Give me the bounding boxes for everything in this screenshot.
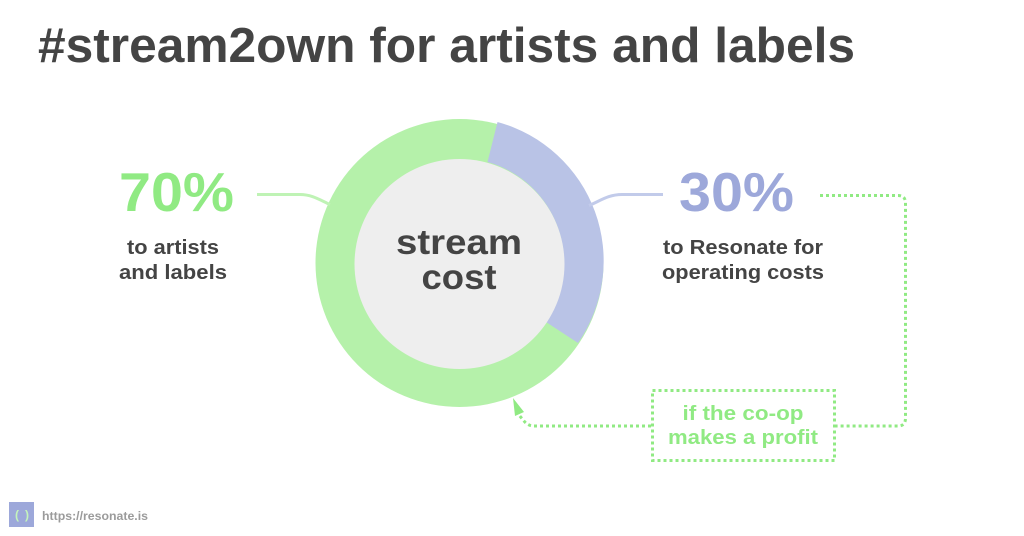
centre label: cost	[422, 258, 497, 297]
footer logo: )	[25, 508, 29, 522]
title: #stream2own for artists and labels	[38, 19, 855, 73]
footer logo: (	[15, 508, 19, 522]
stat: 30%: operating costs	[662, 262, 824, 284]
connector: 70% to donut	[257, 194, 330, 204]
stat: 30%: 30%	[679, 161, 794, 223]
segment: 30% Resonate	[488, 122, 604, 343]
stat: 70%	[119, 161, 234, 284]
connector: donut to 30%	[589, 194, 663, 206]
stat: 70%: to artists	[127, 237, 219, 259]
dotted arrow: 30% to profit box	[820, 196, 906, 426]
footer logo	[9, 502, 34, 527]
centre label	[396, 223, 522, 297]
stat: 70%: 70%	[119, 161, 234, 223]
footer url: https://resonate.is	[42, 509, 148, 523]
stat: 70%: and labels	[119, 262, 227, 284]
callout: if the co-op makes a profit: if the co-op	[682, 403, 804, 425]
stat: 30%: to Resonate for	[663, 237, 823, 259]
callout: if the co-op makes a profit: makes a profit	[668, 427, 818, 449]
centre circle	[354, 159, 564, 369]
donut chart	[316, 119, 604, 407]
centre label: stream	[396, 223, 522, 262]
stat: 30%	[662, 161, 824, 284]
segment: 70% artists and labels	[316, 119, 604, 407]
callout: if the co-op makes a profit	[652, 390, 834, 460]
dotted arrow: profit box back to donut	[513, 398, 651, 426]
